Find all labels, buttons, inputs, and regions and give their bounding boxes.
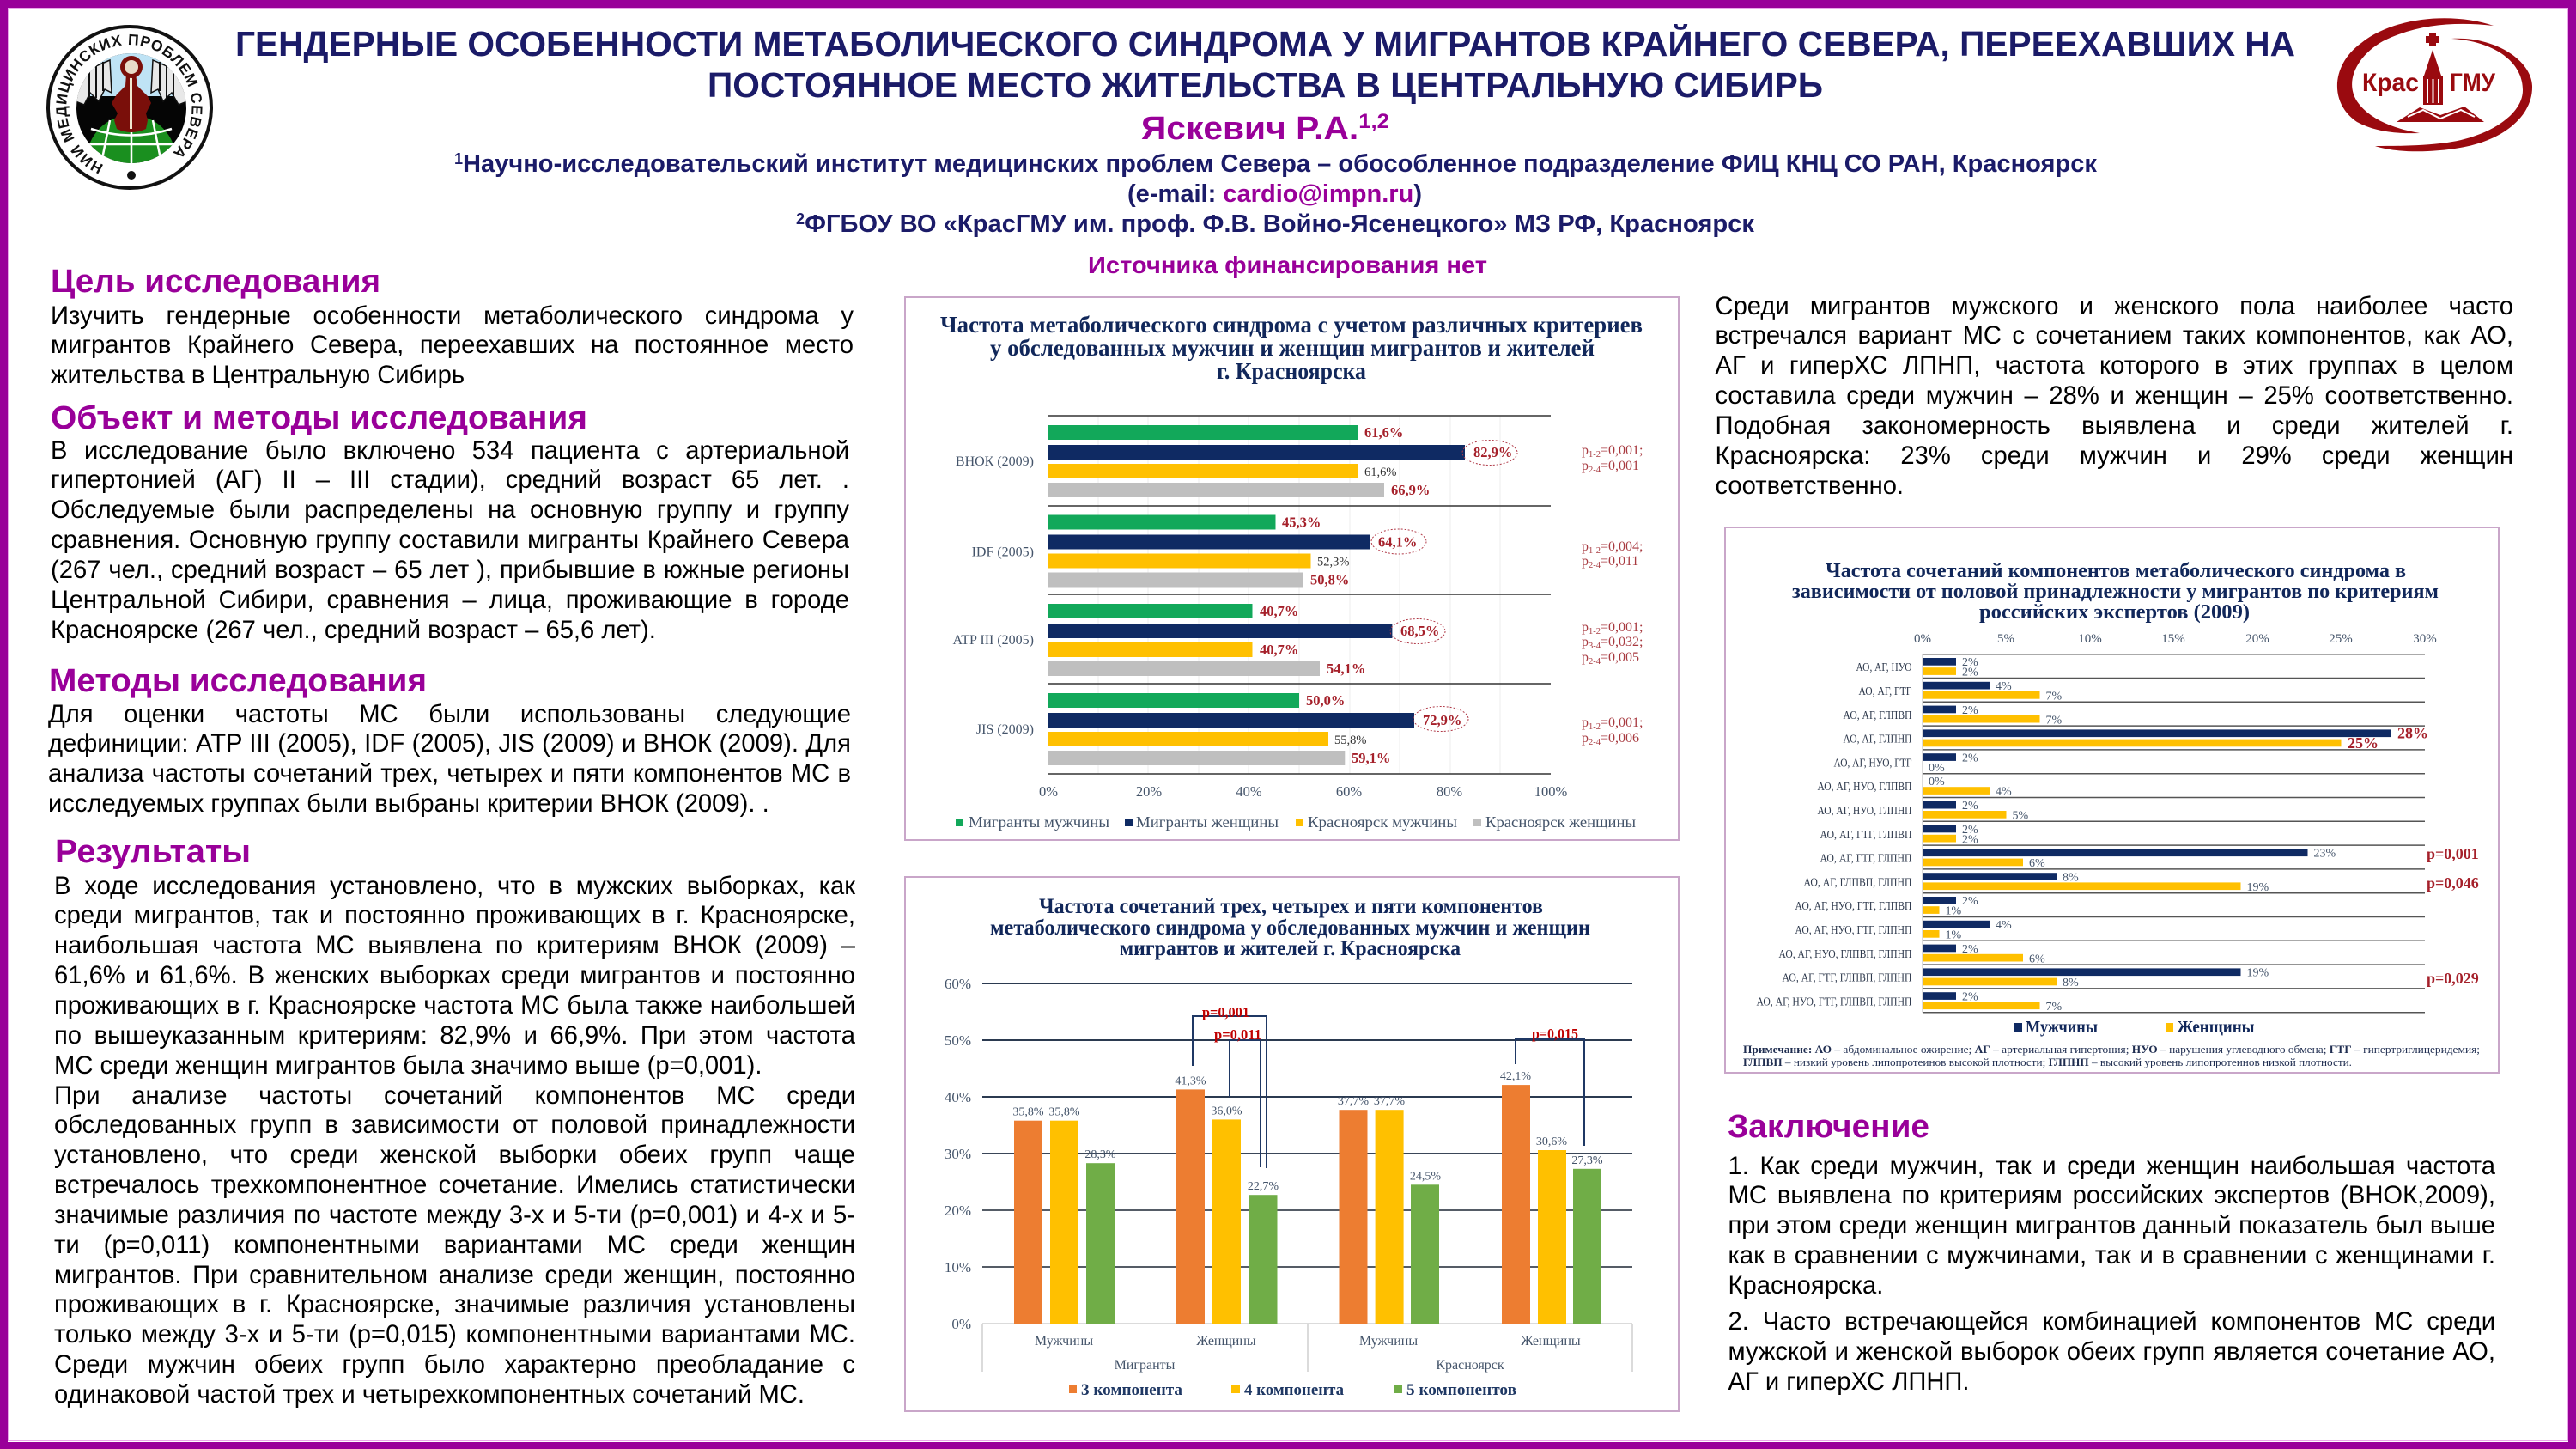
y axis labels: 0% bbox=[951, 1316, 971, 1332]
bars: мигранты женщины: 36,0% bbox=[1211, 1105, 1242, 1117]
y axis labels: 10% bbox=[945, 1259, 971, 1275]
row 6: АО, АГ, НУО, ГЛПВП bbox=[1817, 781, 1911, 794]
bars: красноярск женщины: 30,6% bbox=[1536, 1135, 1567, 1148]
category labels: Красноярск bbox=[1436, 1358, 1504, 1373]
bars: IDF bbox=[972, 514, 1426, 588]
p-values: 2-4 bbox=[1589, 657, 1601, 667]
chart 1 x axis bbox=[1039, 783, 1568, 800]
chart 1 title: Частота метаболического синдрома с учетом различных критериев bbox=[940, 312, 1643, 338]
row 1: АО, АГ, НУО bbox=[1856, 661, 1911, 674]
affiliations: ФГБОУ ВО «КрасГМУ им. проф. Ф.В. Войно-Ясенецкого» МЗ РФ, Красноярск bbox=[805, 210, 1754, 238]
bars: JIS: 50,0% bbox=[1306, 692, 1345, 709]
row 10 bbox=[1803, 871, 2479, 894]
row 11: 2% bbox=[1962, 895, 1978, 908]
text: методы исследования: Для оценки частоты МС были использованы следующие bbox=[48, 701, 851, 728]
chart 3 top axis: 15% bbox=[2161, 632, 2185, 646]
chart 3 legend: Женщины bbox=[2178, 1018, 2255, 1037]
bracket labels: p=0,001 bbox=[1202, 1004, 1249, 1020]
p-values: 1-2 bbox=[1589, 546, 1601, 556]
p-values: 3-4 bbox=[1589, 642, 1601, 651]
chart 3 legend: Мужчины bbox=[2026, 1018, 2098, 1037]
chart 3 top axis: 25% bbox=[2329, 632, 2353, 646]
category labels: Женщины bbox=[1196, 1334, 1256, 1349]
text: результаты: только между 3-х и 5-ти (p=0,015) компонентными вариантами МС. bbox=[54, 1321, 855, 1349]
text: заключение: МС выявлена по критериям российских экспертов (ВНОК,2009), bbox=[1728, 1182, 2495, 1209]
bars: ВНОК: 82,9% bbox=[1473, 444, 1512, 460]
p-values: =0,032; bbox=[1601, 635, 1643, 649]
text: результаты: значимые различия по частоте между 3-х и 5-ти (p=0,001) и 4-х и 5- bbox=[54, 1202, 855, 1229]
y axis labels: 30% bbox=[945, 1146, 971, 1162]
row 14: p=0,029 bbox=[2427, 970, 2479, 987]
y axis labels: 20% bbox=[945, 1202, 971, 1219]
p-values: 2-4 bbox=[1589, 466, 1601, 475]
p-values: p bbox=[1582, 635, 1589, 649]
row 10: АО, АГ, ГЛПВП, ГЛПНП bbox=[1803, 876, 1911, 889]
chart 1 x axis: 0% bbox=[1039, 783, 1058, 800]
row 1 bbox=[1856, 656, 1978, 679]
chart 3 top axis: 0% bbox=[1914, 632, 1931, 646]
chart 1 legend bbox=[956, 813, 1636, 831]
row 7: 2% bbox=[1962, 800, 1978, 813]
text: средний вариант сочетания: соответственно. bbox=[1716, 472, 1904, 500]
panel: chart 3 combinations by sex bbox=[1725, 527, 2499, 1073]
row 11: 1% bbox=[1946, 905, 1961, 918]
chart 2 title: мигрантов и жителей г. Красноярска bbox=[1120, 937, 1461, 960]
bars: ВНОК: ВНОК (2009) bbox=[956, 454, 1034, 469]
text: заключение: мужской и женской выборок обеих групп является сочетание АО, bbox=[1728, 1338, 2495, 1366]
p-values: 1-2 bbox=[1589, 450, 1601, 460]
heading: цель исследования: Цель исследования bbox=[51, 264, 380, 300]
text: результаты: В ходе исследования установлено, что в мужских выборках, как bbox=[54, 873, 855, 900]
category labels: Мужчины bbox=[1359, 1334, 1418, 1349]
chart 1 legend: Красноярск женщины bbox=[1485, 813, 1636, 831]
row 2: 4% bbox=[1996, 680, 2012, 693]
row 3: 7% bbox=[2045, 714, 2063, 727]
row 4: 28% bbox=[2397, 725, 2428, 742]
text: результаты: среди мигрантов, так и постоянно проживающих в г. Красноярске, bbox=[54, 902, 855, 929]
row 13 bbox=[1779, 943, 2045, 965]
text: средний вариант сочетания: встречался вариант МС с сочетанием таких компонентов, как АО, bbox=[1716, 322, 2513, 350]
row 1: 2% bbox=[1962, 656, 1978, 669]
text: средний вариант сочетания: Подобная закономерность выявлена и среди жителей г. bbox=[1716, 412, 2513, 440]
y axis labels: 40% bbox=[945, 1089, 971, 1105]
chart 3 note: Примечание: АО – абдоминальное ожирение; АГ – артериальная гипертония; НУО – нарушения углеводного обмена; ГТГ – гипертриглицеридемия; bbox=[1743, 1043, 2480, 1056]
significance brackets bbox=[1193, 1016, 1584, 1168]
p-values: =0,001; bbox=[1601, 620, 1643, 635]
chart 1 x axis: 20% bbox=[1136, 783, 1162, 800]
chart 2 title: метаболического синдрома у обследованных мужчин и женщин bbox=[990, 916, 1590, 940]
text: результаты: При анализе частоты сочетаний компонентов МС среди bbox=[54, 1082, 855, 1110]
chart 3 top axis: 10% bbox=[2078, 632, 2102, 646]
bars: ATP III: 54,1% bbox=[1327, 661, 1365, 677]
row 8: 2% bbox=[1962, 833, 1978, 846]
text: объект и методы исследования: В исследование было включено 534 пациента с артериальной bbox=[51, 437, 849, 465]
heading: объект и методы: Объект и методы исследования bbox=[51, 400, 587, 436]
row 7 bbox=[1817, 800, 2028, 823]
row 5: 2% bbox=[1962, 752, 1978, 764]
chart 2 legend: 4 компонента bbox=[1244, 1381, 1344, 1399]
chart 3 title: зависимости от половой принадлежности у мигрантов по критериям bbox=[1792, 581, 2439, 603]
category labels: Мигранты bbox=[1115, 1358, 1176, 1373]
bars: мигранты мужчины bbox=[1012, 1106, 1116, 1324]
text: цель исследования: мигрантов Крайнего Севера, переехавших на постоянное место bbox=[51, 332, 854, 359]
text: объект и методы исследования bbox=[51, 437, 849, 644]
logo ring text: НИИ МЕДИЦИНСКИХ ПРОБЛЕМ СЕВЕРА bbox=[56, 34, 203, 174]
chart 3 note: ГЛПВП – низкий уровень липопротеинов высокой плотности; ГЛПНП – высокий уровень липопротеинов низкой плотности. bbox=[1743, 1056, 2352, 1068]
text: результаты: проживающих в г. Красноярске частота МС была также наибольшей bbox=[54, 992, 855, 1020]
bars: мигранты мужчины: 28,3% bbox=[1084, 1148, 1116, 1161]
chart 3 top axis: 20% bbox=[2245, 632, 2269, 646]
bars: JIS bbox=[976, 692, 1468, 766]
chart 1 title: у обследованных мужчин и женщин мигрантов и жителей bbox=[990, 335, 1595, 361]
logo: КрасГМУ bbox=[2337, 18, 2532, 151]
p-values: =0,001; bbox=[1601, 715, 1643, 730]
affiliations: Научно-исследовательский институт медицинских проблем Севера – обособленное подразделение ФИЦ КНЦ СО РАН, Красноярск bbox=[463, 150, 2097, 178]
title: ГЕНДЕРНЫЕ ОСОБЕННОСТИ МЕТАБОЛИЧЕСКОГО СИНДРОМА У МИГРАНТОВ КРАЙНЕГО СЕВЕРА, ПЕРЕЕХАВШИХ НА bbox=[235, 24, 2295, 64]
bars: красноярск женщины: 27,3% bbox=[1571, 1154, 1603, 1167]
chart 1 title bbox=[940, 312, 1643, 384]
chart 2 legend: 3 компонента bbox=[1081, 1381, 1182, 1399]
row 5 bbox=[1834, 752, 1978, 775]
row 9: АО, АГ, ГТГ, ГЛПНП bbox=[1820, 853, 1911, 866]
bars: мигранты мужчины: 35,8% bbox=[1048, 1106, 1080, 1119]
text: результаты bbox=[54, 873, 855, 1409]
text: методы исследования: анализа частоты сочетаний трех, четырех и пяти компонентов МС в bbox=[48, 760, 851, 788]
row 11: АО, АГ, НУО, ГТГ, ГЛПВП bbox=[1795, 900, 1911, 913]
row 9: 23% bbox=[2313, 848, 2336, 861]
text: объект и методы исследования: Красноярске (267 чел., средний возраст – 65,6 лет). bbox=[51, 617, 656, 644]
text: цель исследования: Изучить гендерные особенности метаболического синдрома у bbox=[51, 302, 854, 330]
row 14: АО, АГ, ГТГ, ГЛПВП, ГЛПНП bbox=[1783, 972, 1911, 985]
text: объект и методы исследования: (267 чел., средний возраст – 65 лет ), прибывшие в южные регионы bbox=[51, 557, 849, 584]
row 4: 25% bbox=[2348, 734, 2379, 752]
chart 3 top axis bbox=[1914, 632, 2437, 646]
row 15: 7% bbox=[2045, 1001, 2063, 1014]
p-values: p bbox=[1582, 731, 1589, 746]
bars: ATP III: 68,5% bbox=[1400, 623, 1439, 639]
y axis labels bbox=[945, 976, 971, 1332]
text: заключение: 1. Как среди мужчин, так и среди женщин наибольшая частота bbox=[1728, 1153, 2495, 1180]
affiliations: 2 bbox=[796, 210, 805, 228]
text: результаты: ти (p=0,011) компонентными вариантами МС среди женщин bbox=[54, 1232, 855, 1259]
p-values: =0,004; bbox=[1601, 539, 1643, 554]
text: объект и методы исследования: Центральной Сибири, сравнения – лица, проживающие в городе bbox=[51, 587, 849, 614]
title bbox=[235, 24, 2295, 105]
row 10: 8% bbox=[2063, 871, 2079, 884]
text: результаты: наибольшая частота МС выявлена по критериям ВНОК (2009) – bbox=[54, 932, 855, 959]
chart 1 x axis: 80% bbox=[1437, 783, 1462, 800]
row 2: 7% bbox=[2045, 691, 2063, 703]
row 5: 0% bbox=[1929, 762, 1945, 775]
row 4 bbox=[1843, 725, 2428, 752]
row 10: p=0,046 bbox=[2427, 874, 2479, 892]
logo wordmark: ГМУ bbox=[2450, 69, 2495, 97]
author: 1,2 bbox=[1358, 110, 1389, 133]
row 13: АО, АГ, НУО, ГЛПВП, ГЛПНП bbox=[1779, 948, 1911, 961]
row 15: АО, АГ, НУО, ГТГ, ГЛПВП, ГЛПНП bbox=[1757, 995, 1911, 1008]
bars: красноярск мужчины: 24,5% bbox=[1410, 1170, 1441, 1183]
bars: JIS: 59,1% bbox=[1352, 750, 1390, 766]
chart 1 legend: Красноярск мужчины bbox=[1308, 813, 1457, 831]
row 8 bbox=[1820, 824, 1978, 846]
category labels: Мужчины bbox=[1035, 1334, 1093, 1349]
row 10: 19% bbox=[2246, 881, 2269, 894]
bracket labels: p=0,011 bbox=[1214, 1026, 1261, 1043]
row 2 bbox=[1858, 680, 2063, 703]
bars: ATP III: ATP III (2005) bbox=[953, 633, 1034, 648]
chart 3 title: Частота сочетаний компонентов метаболического синдрома в bbox=[1826, 560, 2406, 582]
y axis labels: 60% bbox=[945, 976, 971, 992]
title: ПОСТОЯННОЕ МЕСТО ЖИТЕЛЬСТВА В ЦЕНТРАЛЬНУЮ СИБИРЬ bbox=[708, 65, 1823, 105]
bars: ATP III bbox=[953, 603, 1445, 677]
logo: НИИ медицинских проблем Севера bbox=[46, 25, 213, 190]
logo wordmark: Крас bbox=[2362, 69, 2419, 97]
row 15: 2% bbox=[1962, 990, 1978, 1003]
row 12: АО, АГ, НУО, ГТГ, ГЛПНП bbox=[1795, 924, 1911, 937]
row 9 bbox=[1820, 845, 2479, 870]
row 9: 6% bbox=[2029, 857, 2045, 870]
bars: ВНОК: 61,6% bbox=[1364, 466, 1396, 479]
bars: ATP III: 40,7% bbox=[1260, 603, 1298, 619]
text: результаты: по вышеуказанным критериям: 82,9% и 66,9%. При этом частота bbox=[54, 1022, 855, 1050]
text: заключение: как в сравнении с мужчинами, так и в сравнении с женщинами г. bbox=[1728, 1242, 2495, 1269]
text: результаты: обследованных групп в зависимости от половой принадлежности bbox=[54, 1111, 855, 1139]
row 4: АО, АГ, ГЛПНП bbox=[1843, 734, 1911, 746]
p-values: p bbox=[1582, 554, 1589, 569]
category labels bbox=[1035, 1334, 1581, 1373]
text: цель исследования bbox=[51, 302, 854, 389]
bars: ВНОК: 66,9% bbox=[1391, 482, 1430, 498]
text: результаты: одинаковой частой трех и четырехкомпонентных сочетаний МС. bbox=[54, 1381, 805, 1409]
y axis labels: 50% bbox=[945, 1032, 971, 1049]
text: объект и методы исследования: сравнения. Основную группу составили мигранты Крайнего Севера bbox=[51, 527, 849, 554]
p-values: 1-2 bbox=[1589, 627, 1601, 636]
affiliations: (e-mail: cardio@impn.ru) bbox=[1127, 180, 1422, 208]
row 14 bbox=[1783, 967, 2479, 989]
row 13: 6% bbox=[2029, 953, 2045, 965]
funding note: Источника финансирования нет bbox=[1088, 252, 1487, 278]
p-values: p bbox=[1582, 539, 1589, 554]
row 13: 2% bbox=[1962, 943, 1978, 956]
row 3: 2% bbox=[1962, 704, 1978, 717]
text: методы исследования bbox=[48, 701, 851, 818]
chart 2 legend: 5 компонентов bbox=[1406, 1381, 1516, 1399]
bars: JIS: JIS (2009) bbox=[976, 722, 1034, 737]
row 12: 1% bbox=[1946, 929, 1961, 941]
p-values: =0,005 bbox=[1601, 650, 1639, 665]
chart 2 title: Частота сочетаний трех, четырех и пяти компонентов bbox=[1039, 895, 1543, 918]
text: цель исследования: жительства в Центральную Сибирь bbox=[51, 362, 465, 389]
row 9: p=0,001 bbox=[2427, 845, 2479, 862]
p-values: p bbox=[1582, 443, 1589, 458]
bars: мигранты женщины bbox=[1175, 1075, 1279, 1324]
p-values: 2-4 bbox=[1589, 561, 1601, 570]
p-values: =0,001; bbox=[1601, 443, 1643, 458]
bracket labels: p=0,015 bbox=[1532, 1026, 1578, 1042]
row 14: 19% bbox=[2246, 967, 2269, 980]
row 14: 8% bbox=[2063, 977, 2079, 989]
panel: chart 2 combinations of components bbox=[905, 877, 1679, 1411]
bars: мигранты мужчины: 35,8% bbox=[1012, 1106, 1044, 1119]
row 7: 5% bbox=[2013, 809, 2028, 823]
chart 2 legend bbox=[1069, 1381, 1516, 1399]
chart 1 x axis: 60% bbox=[1336, 783, 1362, 800]
affiliations bbox=[454, 150, 2097, 238]
category labels: Женщины bbox=[1521, 1334, 1581, 1349]
chart 1 legend: Мигранты женщины bbox=[1136, 813, 1279, 831]
row 3 bbox=[1843, 704, 2063, 727]
row 7: АО, АГ, НУО, ГЛПНП bbox=[1817, 805, 1911, 818]
bars: красноярск женщины: 42,1% bbox=[1500, 1070, 1531, 1083]
text: средний вариант сочетания: Красноярска: 23% среди мужчин и 29% среди женщин bbox=[1716, 442, 2513, 470]
p-values: p bbox=[1582, 715, 1589, 730]
text: заключение: 2. Часто встречающейся комбинацией компонентов МС среди bbox=[1728, 1308, 2495, 1336]
row 5: АО, АГ, НУО, ГТГ bbox=[1834, 757, 1911, 770]
bars: красноярск мужчины: 37,7% bbox=[1374, 1095, 1405, 1108]
bars: красноярск мужчины: 37,7% bbox=[1338, 1095, 1369, 1108]
p-values: =0,001 bbox=[1601, 459, 1639, 473]
heading: заключение: Заключение bbox=[1728, 1109, 1929, 1145]
bars: мигранты женщины: 41,3% bbox=[1175, 1075, 1206, 1087]
row 11 bbox=[1795, 895, 1978, 918]
chart 1 x axis: 100% bbox=[1534, 783, 1568, 800]
text: результаты: мигрантов. При сравнительном анализе среди женщин, постоянно bbox=[54, 1262, 855, 1289]
chart 3 title bbox=[1792, 560, 2439, 624]
p-values: 2-4 bbox=[1589, 738, 1601, 747]
text: результаты: проживающих в г. Красноярске, значимые различия установлены bbox=[54, 1291, 855, 1318]
heading: результаты: Результаты bbox=[55, 834, 251, 870]
text: средний вариант сочетания bbox=[1716, 293, 2513, 500]
bars: мигранты женщины: 22,7% bbox=[1248, 1180, 1279, 1193]
text: объект и методы исследования: Обследуемые были распределены на основную группу и группу bbox=[51, 496, 849, 524]
row 2: АО, АГ, ГТГ bbox=[1858, 685, 1911, 698]
bars: IDF: 52,3% bbox=[1317, 555, 1349, 569]
bars: красноярск женщины bbox=[1500, 1070, 1603, 1324]
row 6 bbox=[1817, 776, 2012, 799]
panel: chart 1 frequency by criteria bbox=[905, 297, 1679, 840]
row 6: 4% bbox=[1996, 786, 2012, 799]
row 8: 2% bbox=[1962, 824, 1978, 837]
bars: IDF: 45,3% bbox=[1282, 514, 1321, 531]
heading: методы исследования: Методы исследования bbox=[49, 663, 427, 699]
row 6: 0% bbox=[1929, 776, 1945, 788]
p-values: =0,011 bbox=[1601, 554, 1638, 569]
text: результаты: встречалось трехкомпонентное сочетание. Имелись статистически bbox=[54, 1172, 855, 1199]
chart 1 title: г. Красноярска bbox=[1217, 358, 1366, 384]
author: Яскевич Р.А. bbox=[1141, 111, 1344, 147]
text: заключение bbox=[1728, 1153, 2495, 1395]
p-values bbox=[1582, 443, 1643, 747]
bars: красноярск мужчины bbox=[1338, 1095, 1441, 1324]
row 8: АО, АГ, ГТГ, ГЛПВП bbox=[1820, 829, 1911, 842]
text: средний вариант сочетания: АГ и гиперХС ЛПНП, частота которого в этих группах в целом bbox=[1716, 352, 2513, 380]
row 3: АО, АГ, ГЛПВП bbox=[1843, 709, 1911, 722]
text: результаты: Среди мужчин обеих групп было характерно преобладание с bbox=[54, 1351, 855, 1379]
text: заключение: Красноярска. bbox=[1728, 1272, 1883, 1300]
text: методы исследования: исследуемых группах были выбраны критерии ВНОК (2009). . bbox=[48, 790, 769, 818]
p-values: p bbox=[1582, 459, 1589, 473]
bars: JIS: 72,9% bbox=[1423, 712, 1461, 728]
chart 1 legend: Мигранты мужчины bbox=[969, 813, 1109, 831]
bars: IDF: IDF (2005) bbox=[972, 545, 1034, 560]
p-values: 1-2 bbox=[1589, 722, 1601, 732]
bars: IDF: 64,1% bbox=[1378, 534, 1417, 550]
row 1: 2% bbox=[1962, 667, 1978, 679]
text: заключение: при этом среди женщин мигрантов данный показатель был выше bbox=[1728, 1212, 2495, 1239]
p-values: p bbox=[1582, 650, 1589, 665]
text: результаты: 61,6% и 61,6%. В женских выборках среди мигрантов и постоянно bbox=[54, 962, 855, 989]
bars: ВНОК bbox=[956, 424, 1517, 498]
bars: IDF: 50,8% bbox=[1310, 572, 1349, 588]
logo wordmark bbox=[2362, 69, 2495, 97]
bars: JIS: 55,8% bbox=[1334, 734, 1366, 747]
text: методы исследования: дефиниции: ATP III (2005), IDF (2005), JIS (2009) и ВНОК (2009). Для bbox=[48, 730, 851, 758]
row 15 bbox=[1757, 990, 2063, 1014]
chart 3 title: российских экспертов (2009) bbox=[1979, 601, 2250, 624]
text: средний вариант сочетания: Среди мигрантов мужского и женского пола наиболее часто bbox=[1716, 293, 2513, 320]
p-values: =0,006 bbox=[1601, 731, 1639, 746]
text: результаты: МС среди женщин мигрантов была значимо выше (p=0,001). bbox=[54, 1052, 762, 1080]
text: заключение: АГ и гиперХС ЛПНП. bbox=[1728, 1367, 1970, 1395]
chart 3 note bbox=[1743, 1043, 2480, 1068]
chart 3 top axis: 30% bbox=[2413, 632, 2437, 646]
affiliations: 1 bbox=[454, 150, 463, 167]
row 12 bbox=[1795, 919, 2012, 941]
text: результаты: установлено, что среди женской выборки обеих групп чаще bbox=[54, 1142, 855, 1169]
p-values: p bbox=[1582, 620, 1589, 635]
chart 2 title bbox=[990, 895, 1590, 960]
text: средний вариант сочетания: составила среди мужчин – 28% и женщин – 25% соответственно. bbox=[1716, 382, 2513, 410]
bars: ATP III: 40,7% bbox=[1260, 642, 1298, 658]
row 12: 4% bbox=[1996, 919, 2012, 932]
chart 1 x axis: 40% bbox=[1236, 783, 1262, 800]
bracket labels bbox=[1202, 1004, 1578, 1043]
bars: ВНОК: 61,6% bbox=[1364, 424, 1403, 441]
chart 3 top axis: 5% bbox=[1997, 632, 2014, 646]
text: объект и методы исследования: гипертонией (АГ) II – III стадии), средний возраст 65 лет. . bbox=[51, 466, 849, 494]
chart 3 legend bbox=[2014, 1018, 2255, 1037]
